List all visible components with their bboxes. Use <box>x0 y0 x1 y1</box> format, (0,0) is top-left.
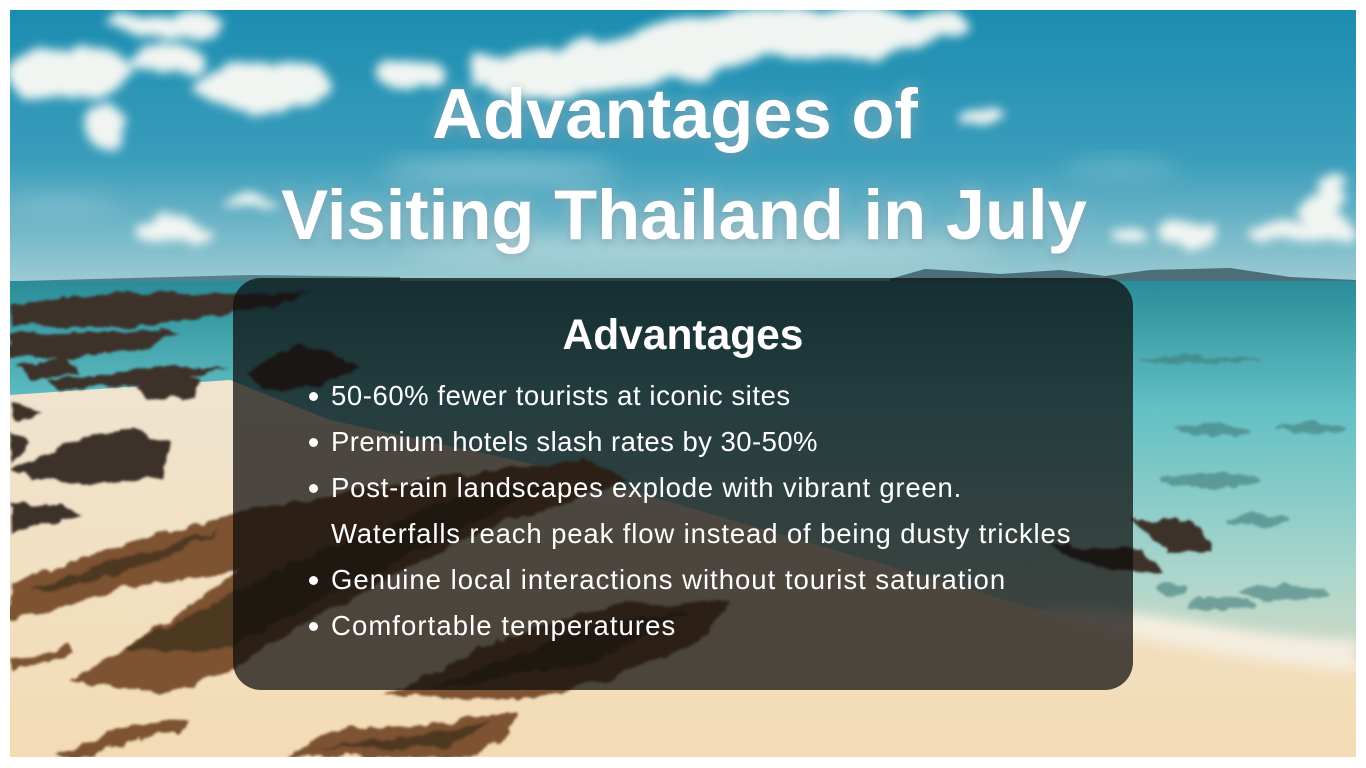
bullet list: Premium hotels slash rates by 30-50% <box>331 426 818 457</box>
panel: advantages <box>233 278 1133 690</box>
distant islands <box>20 268 1356 284</box>
water texture <box>1140 357 1345 611</box>
title line 2: Visiting Thailand in July <box>281 175 1087 254</box>
bullet list: Waterfalls reach peak flow instead of being dusty trickles <box>331 518 1071 549</box>
sand <box>10 380 1356 757</box>
clouds <box>10 2 1360 247</box>
bullet list: Genuine local interactions without tourist saturation <box>331 564 1006 595</box>
rocks <box>10 292 1215 572</box>
title line 1: Advantages of <box>432 74 918 153</box>
panel heading: Advantages <box>563 312 803 359</box>
bullet list: Comfortable temperatures <box>331 610 676 641</box>
bullet list: Post-rain landscapes explode with vibrant green. <box>331 472 962 503</box>
bullet list <box>309 380 1071 641</box>
bullet list: 50-60% fewer tourists at iconic sites <box>331 380 791 411</box>
